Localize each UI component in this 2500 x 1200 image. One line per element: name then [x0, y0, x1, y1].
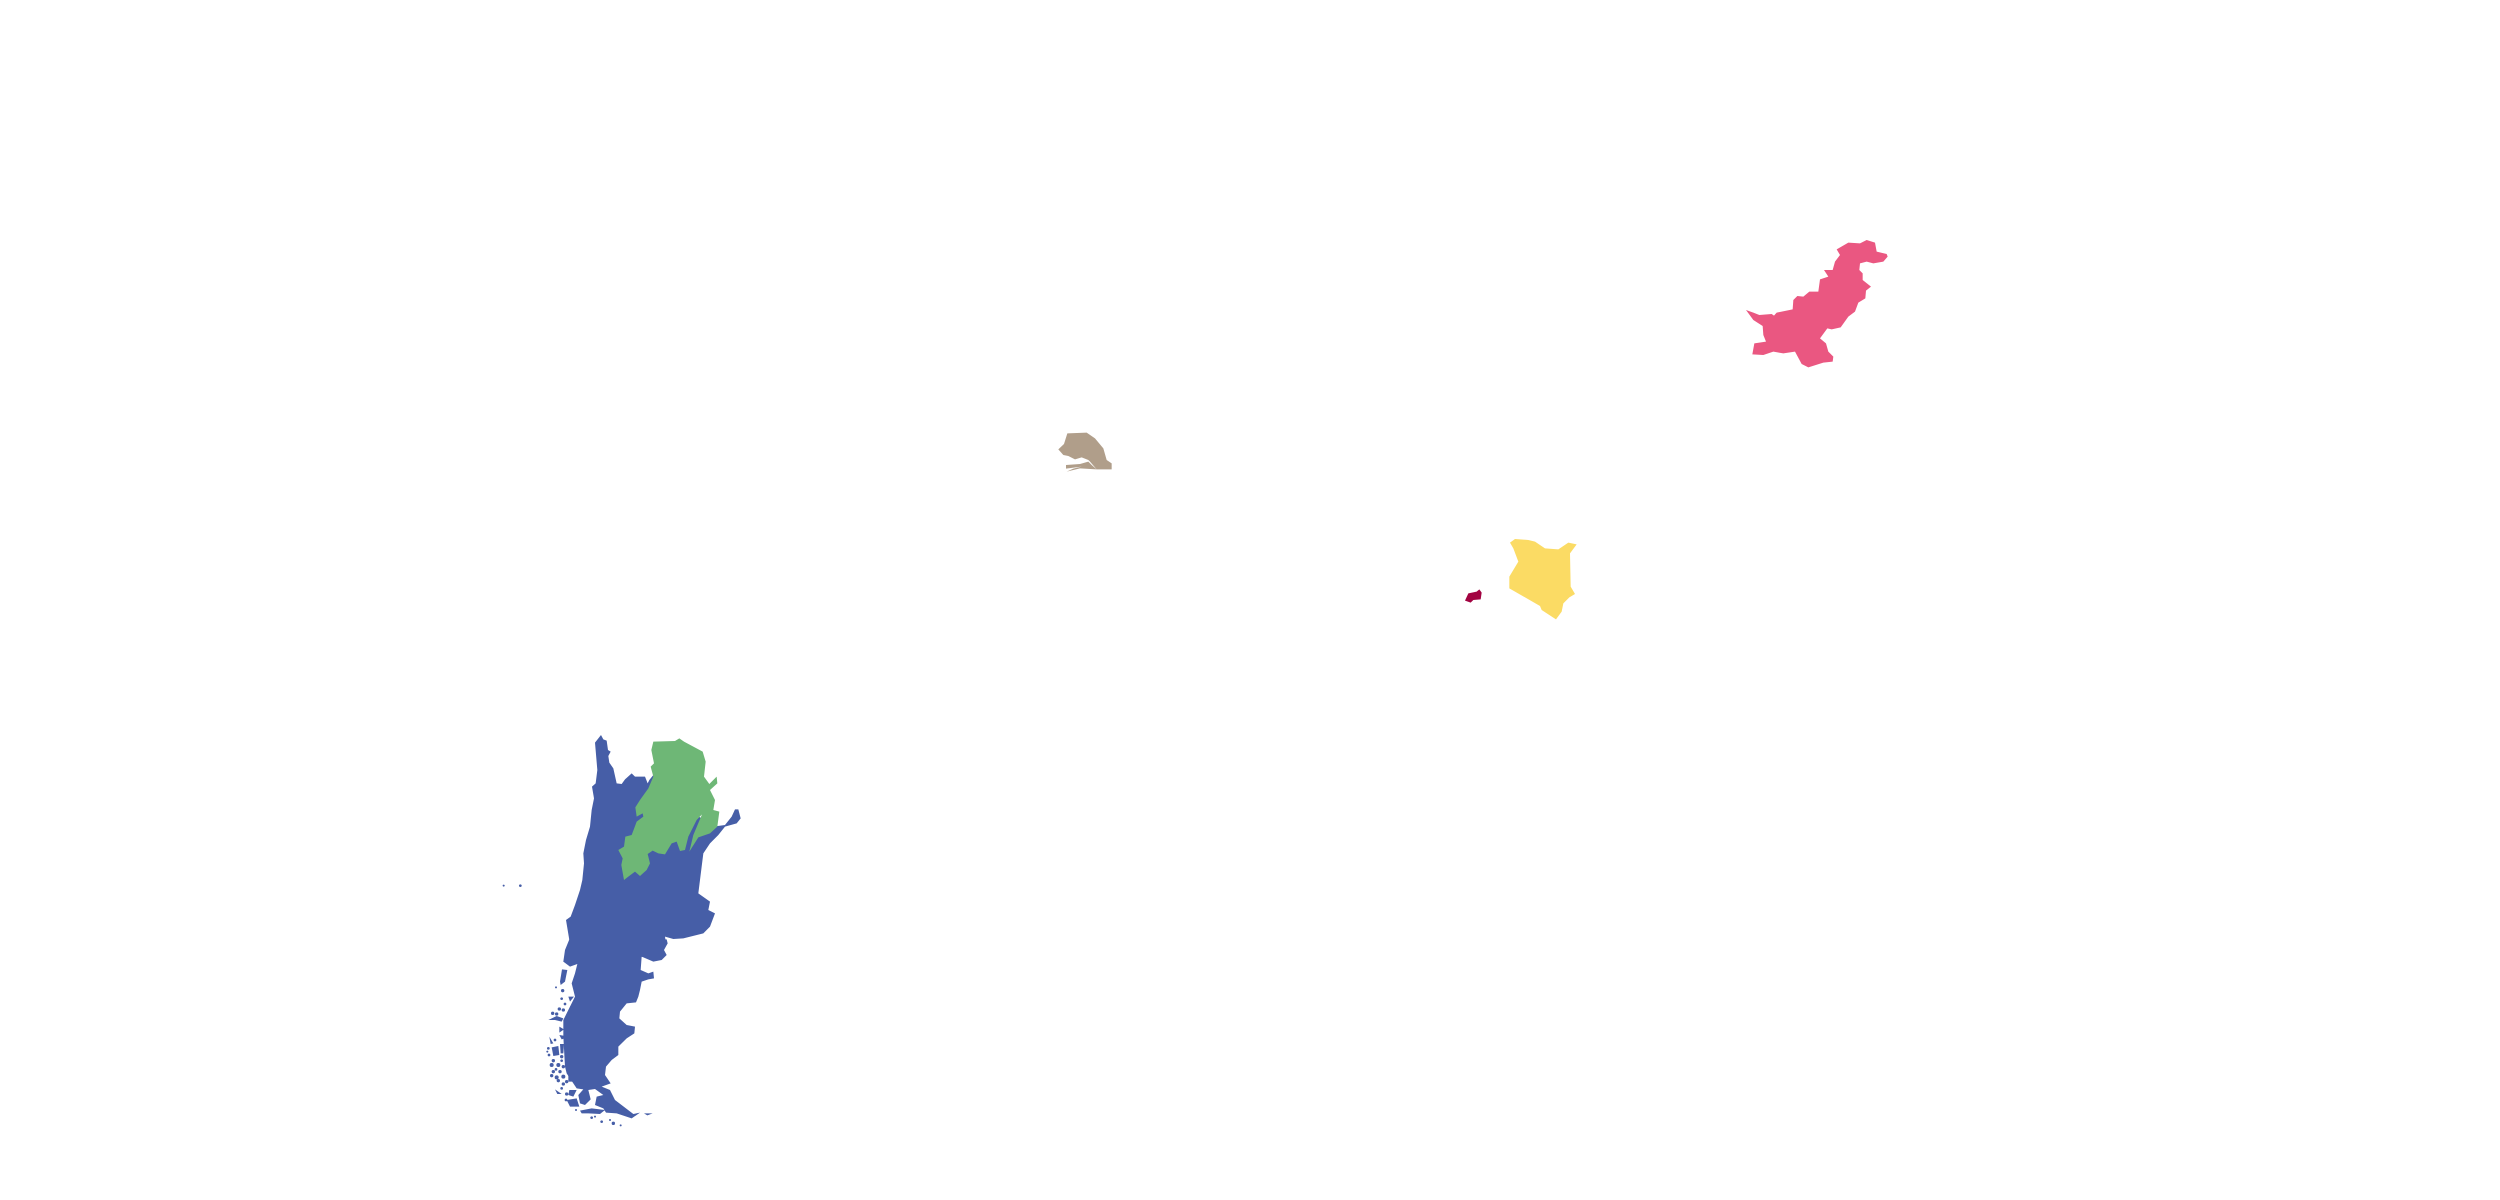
shape: Senegal (tan): [1058, 433, 1112, 472]
shape: Chile and Argentina (blue): [503, 735, 741, 1126]
shape: Paraguay/Uruguay region (green): [618, 738, 719, 880]
shape: Kenya (yellow): [1509, 539, 1577, 619]
shape: Pakistan (pink): [1746, 240, 1888, 367]
shape: Rwanda (crimson): [1465, 589, 1482, 603]
